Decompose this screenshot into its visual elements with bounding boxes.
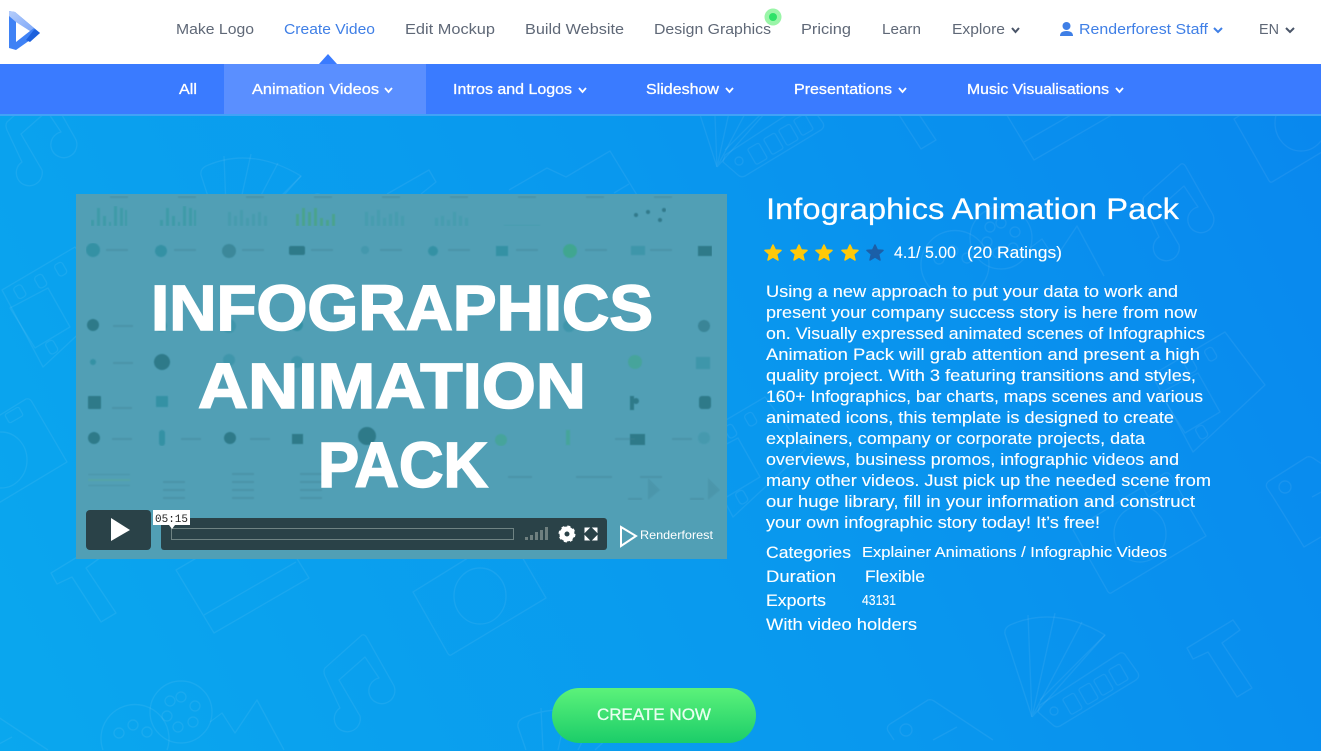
video title text: INFOGRAPHICS (151, 272, 653, 344)
description paragraph: our huge library, fill in your information and construct (766, 492, 1195, 511)
sub navigation bar (0, 54, 1321, 116)
nav links: Design Graphics (654, 21, 771, 38)
language selector (1259, 21, 1294, 38)
description paragraph: explainers, company or corporate projects, data (766, 429, 1146, 448)
description paragraph: your own infographic story today! It’s free! (766, 513, 1100, 532)
template details: Exports (766, 591, 826, 610)
renderforest watermark: Renderforest (640, 528, 714, 542)
description paragraph: Using a new approach to put your data to work and (766, 282, 1178, 301)
description paragraph: Animation Pack will grab attention and present a high (766, 345, 1200, 364)
template details (766, 543, 1167, 634)
nav links: Pricing (801, 21, 851, 38)
user account: Renderforest Staff (1079, 21, 1209, 38)
video thumbnail: bar charts row (91, 206, 666, 226)
description paragraph: on. Visually expressed animated scenes of Infographics (766, 324, 1205, 343)
renderforest watermark (621, 527, 714, 546)
description paragraph (766, 282, 1211, 532)
template details: With video holders (766, 615, 917, 634)
duration tooltip (153, 510, 190, 529)
video title text (151, 272, 653, 501)
sub navigation bar: Presentations (794, 81, 892, 98)
language selector: EN (1259, 21, 1279, 38)
sub navigation bar: Music Visualisations (967, 81, 1109, 98)
sub navigation bar: All (179, 81, 197, 98)
video title text: PACK (318, 429, 488, 501)
create now button: CREATE NOW (597, 706, 711, 724)
description paragraph: 160+ Infographics, bar charts, maps scenes and various (766, 387, 1203, 406)
description paragraph: many other videos. Just pick up the needed scene from (766, 471, 1211, 490)
template details: 43131 (862, 592, 896, 609)
nav links: Make Logo (176, 21, 254, 38)
template details: Duration (766, 567, 836, 586)
sub navigation bar: Intros and Logos (453, 81, 572, 98)
nav links: Build Website (525, 21, 624, 38)
template details: Flexible (865, 567, 925, 586)
nav links: Learn (882, 21, 921, 38)
top navigation bar (0, 0, 1321, 64)
duration tooltip: 05:15 (155, 514, 188, 526)
star rating (765, 243, 1062, 262)
nav links (176, 21, 1019, 38)
description paragraph: present your company success story is here from now (766, 303, 1198, 322)
video player (76, 194, 727, 559)
description paragraph: quality project. With 3 featuring transitions and styles, (766, 366, 1196, 385)
template details: Explainer Animations / Infographic Videos (862, 544, 1167, 561)
star rating: 4.1/ 5.00 (894, 243, 956, 262)
template details: Categories (766, 543, 851, 562)
nav links: Explore (952, 21, 1005, 38)
nav links: Create Video (284, 21, 375, 38)
description paragraph: animated icons, this template is designed to create (766, 408, 1174, 427)
video title text: ANIMATION (198, 350, 586, 422)
template title: Infographics Animation Pack (766, 193, 1180, 226)
player play button (86, 510, 151, 550)
sub navigation bar: Slideshow (646, 81, 719, 98)
star rating: (20 Ratings) (967, 243, 1062, 262)
new badge: green dot (764, 8, 782, 26)
create now button (552, 688, 756, 743)
video thumbnail: icon rows (86, 243, 712, 446)
logo (9, 11, 40, 50)
sub navigation bar: Animation Videos (252, 81, 379, 98)
description paragraph: overviews, business promos, infographic videos and (766, 450, 1179, 469)
player control bar (161, 518, 607, 550)
video thumbnail: faint labels and lists (88, 196, 720, 500)
nav links: Edit Mockup (405, 21, 495, 38)
